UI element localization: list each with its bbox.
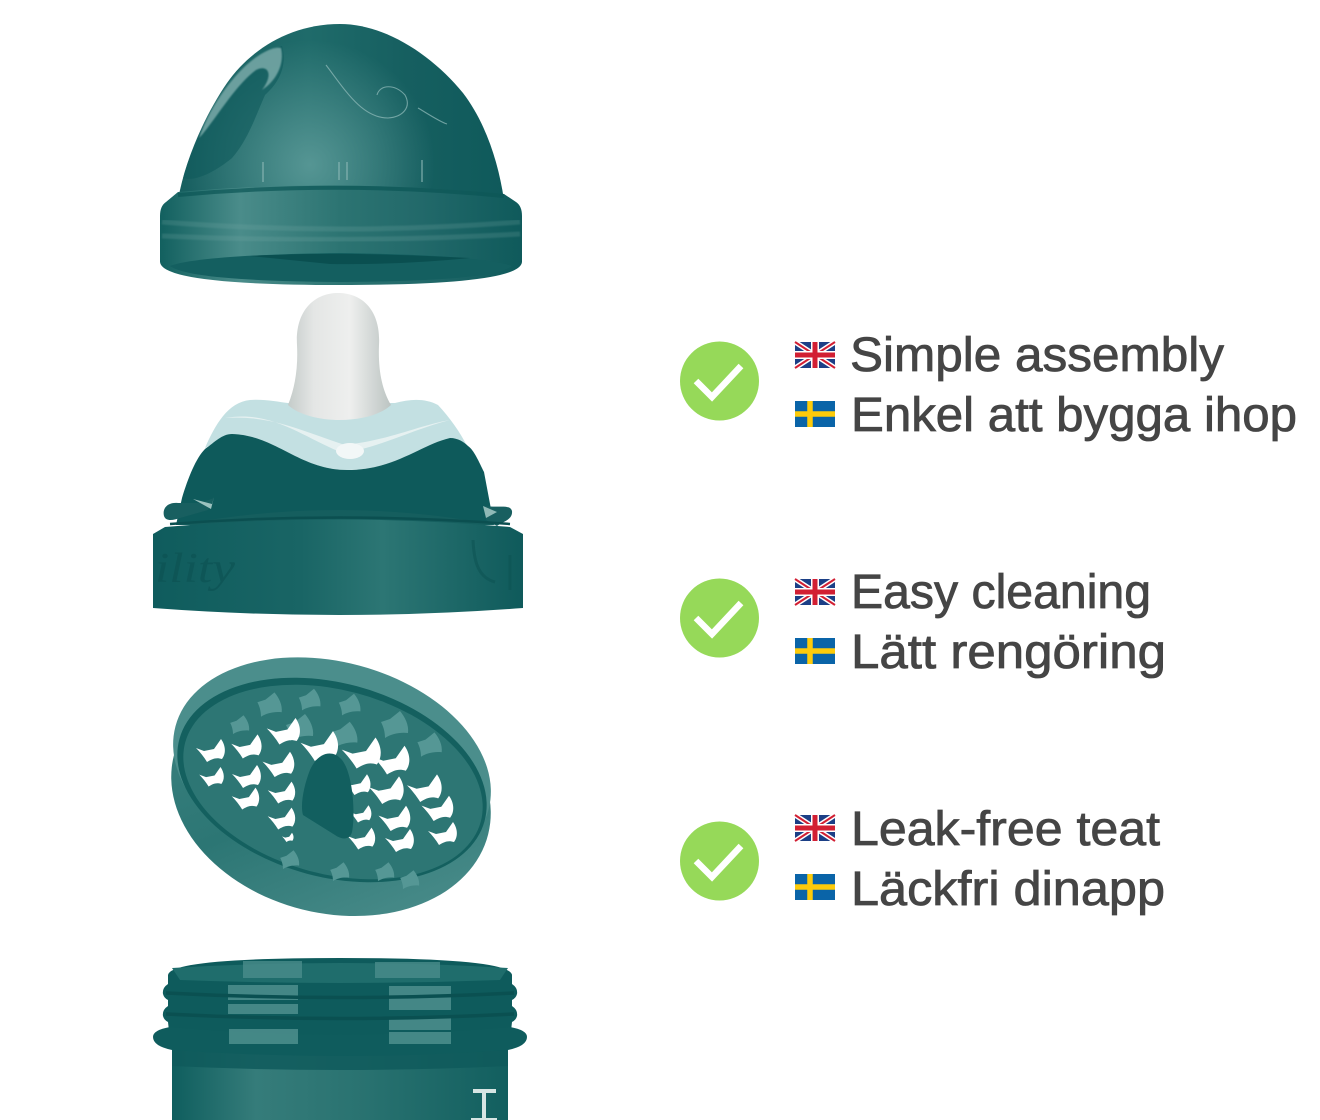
check icon xyxy=(680,822,759,900)
Swedish flag xyxy=(795,401,835,427)
UK flag xyxy=(795,815,835,841)
disc lower rim xyxy=(145,641,517,949)
collar top xyxy=(176,434,494,525)
disc raised scales xyxy=(230,689,442,889)
heading English: Simple assembly xyxy=(850,329,1224,382)
check icon xyxy=(680,578,759,658)
disc centre stem xyxy=(302,754,354,838)
filter disc xyxy=(145,624,517,949)
heading Swedish: Lätt rengöring xyxy=(851,626,1166,679)
Swedish flag xyxy=(795,638,835,664)
Swedish flag xyxy=(795,874,835,900)
check icon xyxy=(680,342,759,420)
bottle threads xyxy=(163,958,517,1040)
teat shaft xyxy=(288,293,391,420)
cap reflection xyxy=(183,46,447,182)
cap dome xyxy=(178,24,504,200)
disc inner plate xyxy=(161,654,505,910)
heading English: Easy cleaning xyxy=(851,566,1151,619)
bottle neck xyxy=(153,958,527,1120)
UK flag xyxy=(795,579,835,605)
UK flag xyxy=(795,342,835,368)
bottle cap xyxy=(160,24,522,285)
teat and collar xyxy=(153,293,523,615)
heading Swedish: Enkel att bygga ihop xyxy=(851,389,1297,442)
cap band xyxy=(160,185,522,285)
feature: simple assembly xyxy=(680,329,1297,442)
feature: leak-free teat xyxy=(680,803,1165,916)
bottle body xyxy=(172,1046,508,1120)
disc holes xyxy=(196,718,457,852)
feature: easy cleaning xyxy=(680,566,1166,679)
collar band xyxy=(153,520,523,615)
collar embossed logo xyxy=(155,540,510,592)
teat flange xyxy=(205,400,467,470)
bottle flange xyxy=(153,1027,527,1056)
collar tabs xyxy=(164,498,214,520)
cap opening xyxy=(170,253,512,282)
bottle scale mark xyxy=(471,1091,497,1120)
heading English: Leak-free teat xyxy=(851,803,1160,856)
heading Swedish: Läckfri dinapp xyxy=(851,863,1165,916)
collar embossed logo: ility xyxy=(155,546,235,592)
